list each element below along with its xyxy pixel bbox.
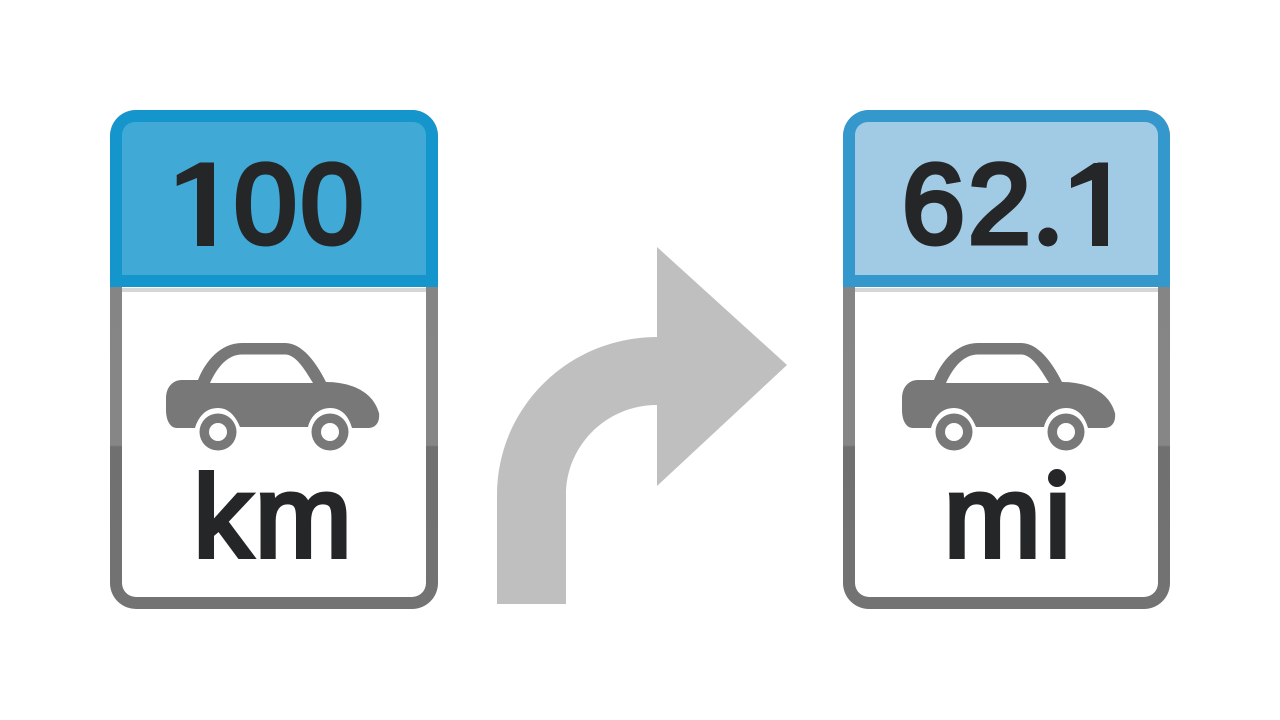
panel: kilometres sign [110, 110, 438, 609]
value: 62.1: 62.1 [902, 141, 1132, 267]
sign body frame [110, 110, 438, 609]
unit: km: km [194, 452, 352, 582]
icon: car [166, 343, 379, 454]
sign body frame [843, 110, 1170, 609]
unit: mi: mi [944, 452, 1071, 582]
value: 100: 100 [174, 141, 363, 267]
panel: miles sign [843, 110, 1170, 609]
blue header [110, 110, 438, 287]
arrow: conversion direction [497, 247, 787, 604]
icon: car [902, 343, 1115, 454]
light blue header [843, 110, 1170, 287]
